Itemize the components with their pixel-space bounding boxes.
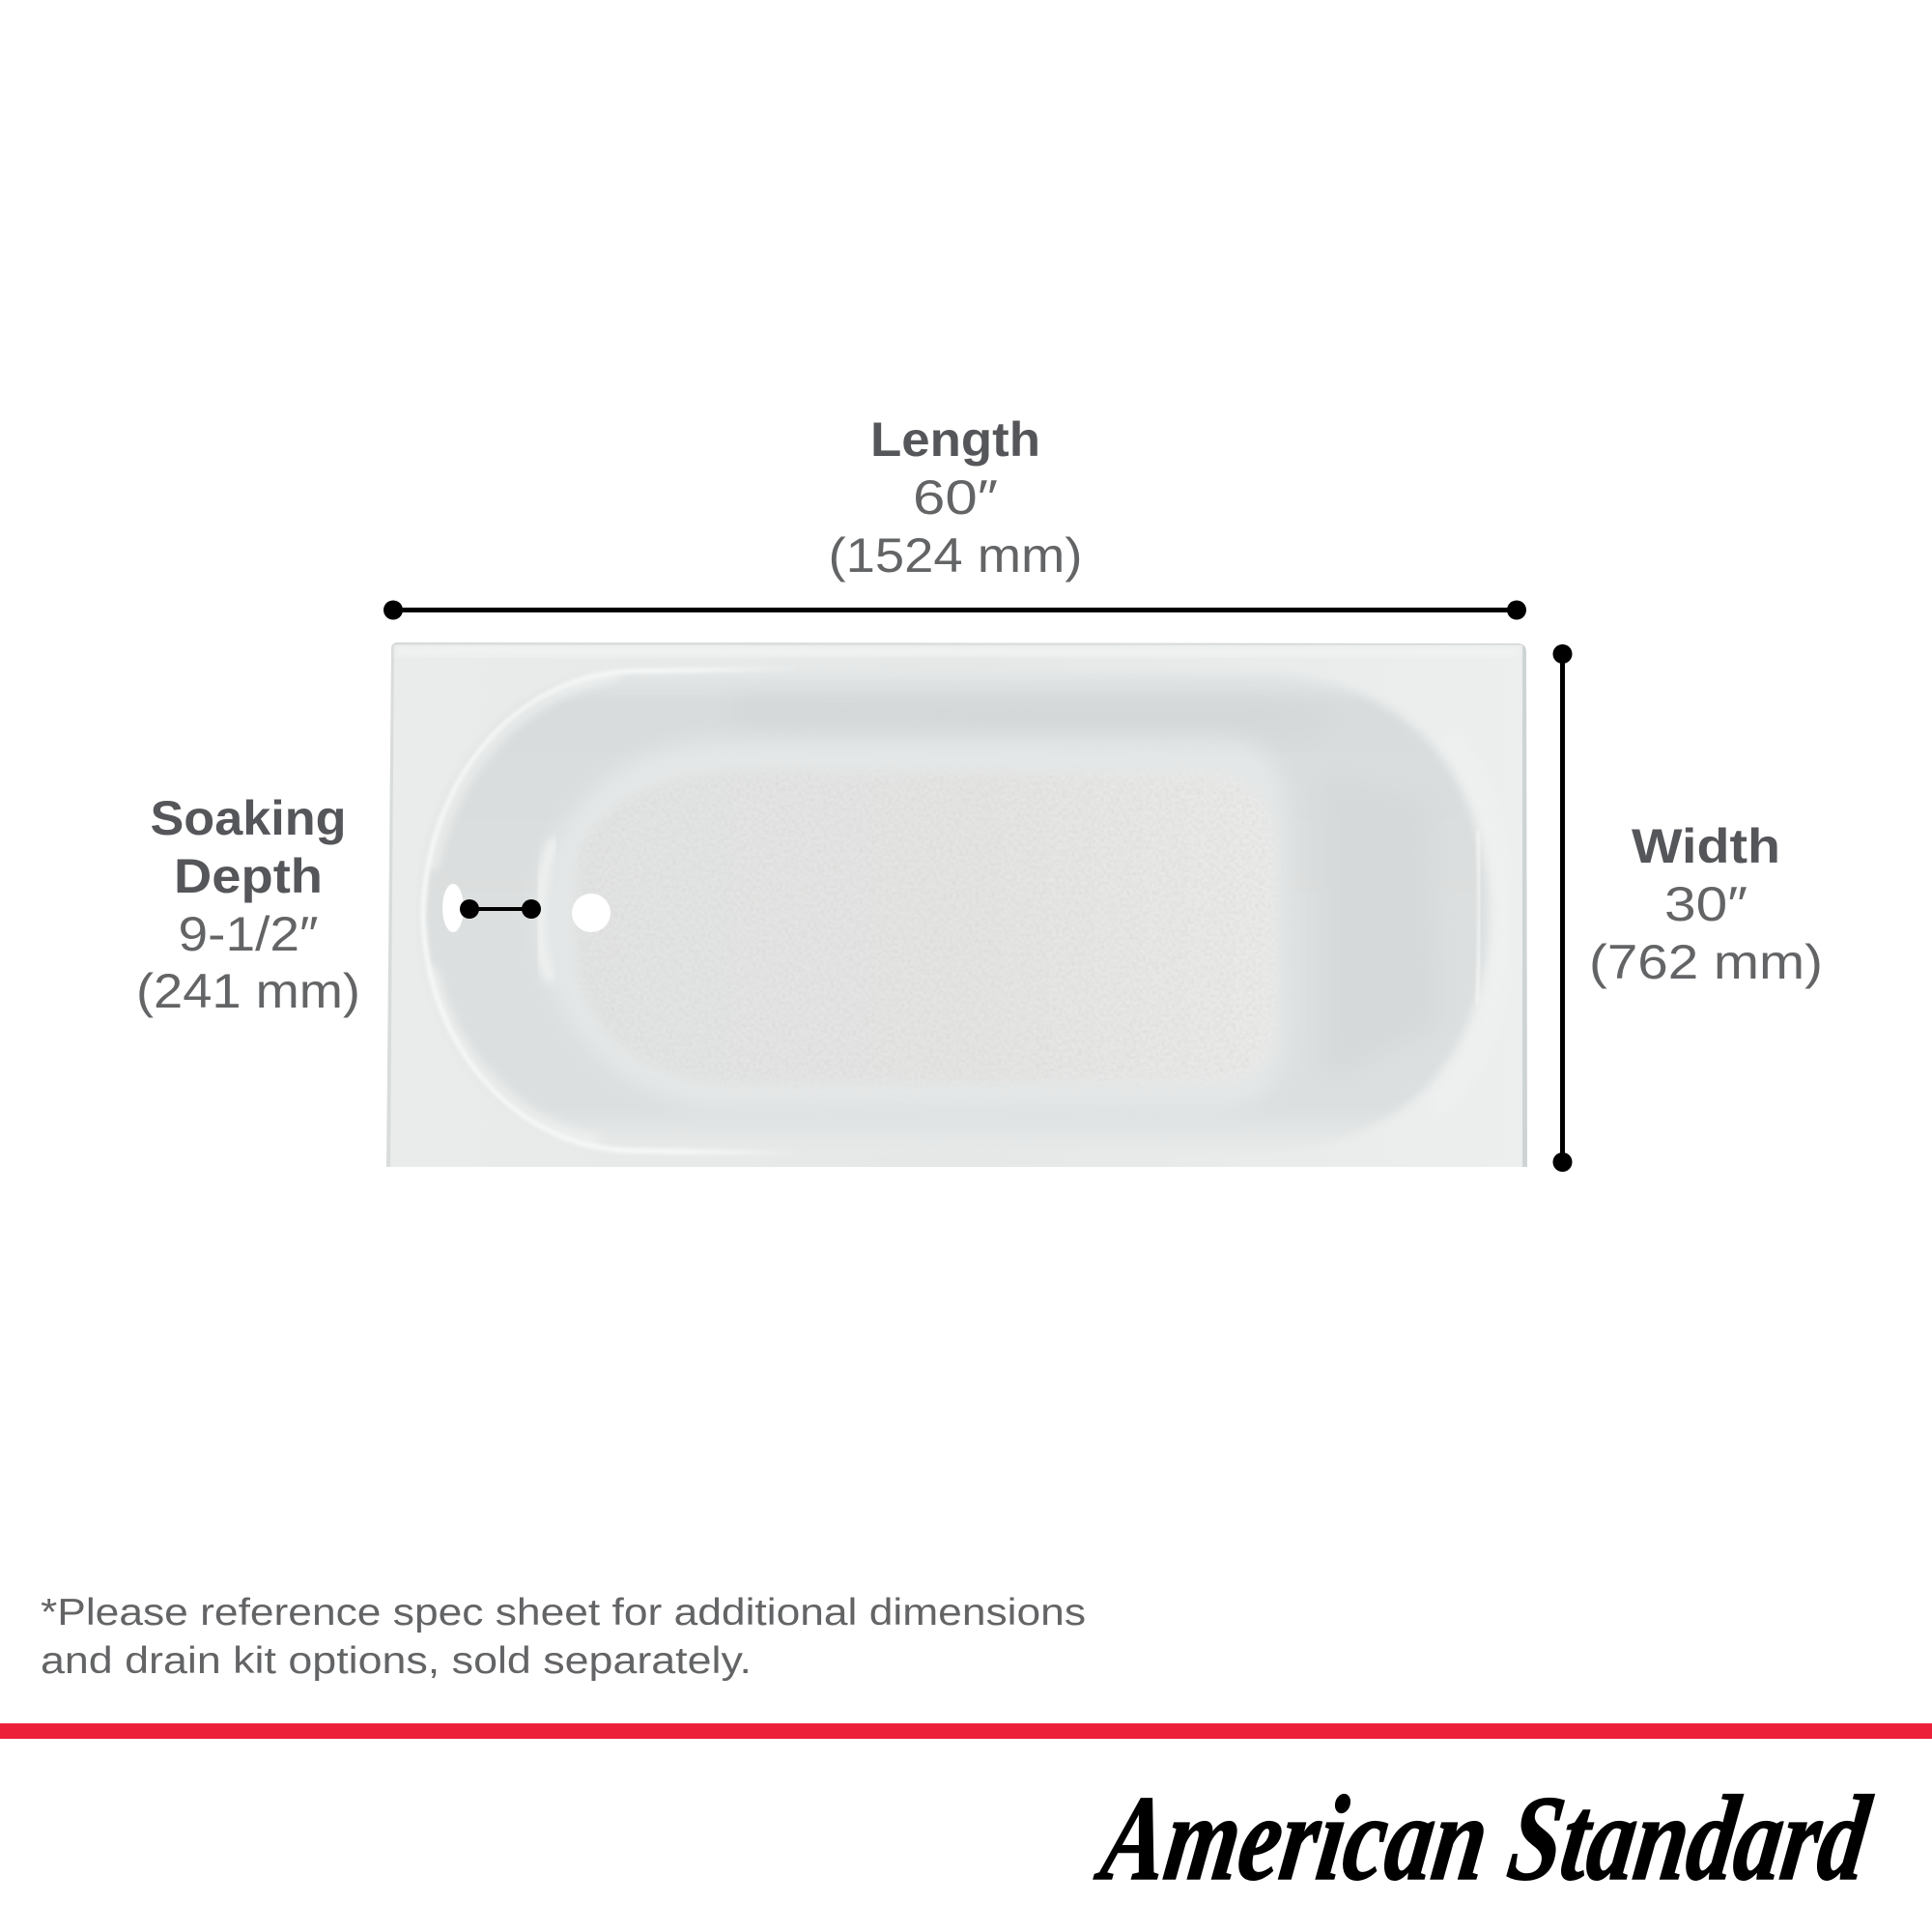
left basin highlight	[420, 668, 728, 1153]
footnote: *Please reference spec sheet for additional dimensions	[41, 1592, 1086, 1634]
tub outer rim	[386, 642, 1527, 1167]
length label: Length	[870, 412, 1040, 467]
length label	[829, 412, 1082, 582]
soaking depth label: Depth	[174, 849, 323, 903]
width label: 30″	[1664, 877, 1747, 931]
soaking depth label: 9-1/2″	[178, 907, 319, 961]
bathtub illustration	[386, 641, 1528, 1169]
length dimension line	[384, 601, 1526, 620]
soaking depth label	[136, 791, 360, 1018]
infographic canvas	[0, 421, 1932, 1881]
width label: (762 mm)	[1589, 935, 1823, 989]
right basin shade	[1323, 773, 1439, 1082]
width label	[1589, 819, 1823, 989]
soaking depth label: Soaking	[151, 791, 346, 845]
speckled floor	[574, 770, 1275, 1085]
right rim highlight	[1476, 831, 1480, 1005]
width label: Width	[1632, 819, 1780, 873]
footnote	[41, 1592, 1086, 1682]
length label: 60″	[913, 470, 998, 525]
red divider bar	[0, 1723, 1932, 1739]
overflow opening	[442, 884, 464, 932]
soaking depth dimension line	[460, 899, 541, 919]
basin	[422, 668, 1503, 1153]
drain surround highlight	[539, 838, 554, 981]
footnote: and drain kit options, sold separately.	[41, 1640, 752, 1682]
width dimension line	[1553, 644, 1573, 1172]
length label: (1524 mm)	[829, 528, 1082, 582]
basin top shadow band	[734, 699, 1338, 734]
floor ramp	[537, 740, 1288, 1111]
tub edge shading	[386, 641, 1528, 1169]
soaking depth label: (241 mm)	[136, 964, 360, 1018]
drain opening	[572, 894, 611, 932]
